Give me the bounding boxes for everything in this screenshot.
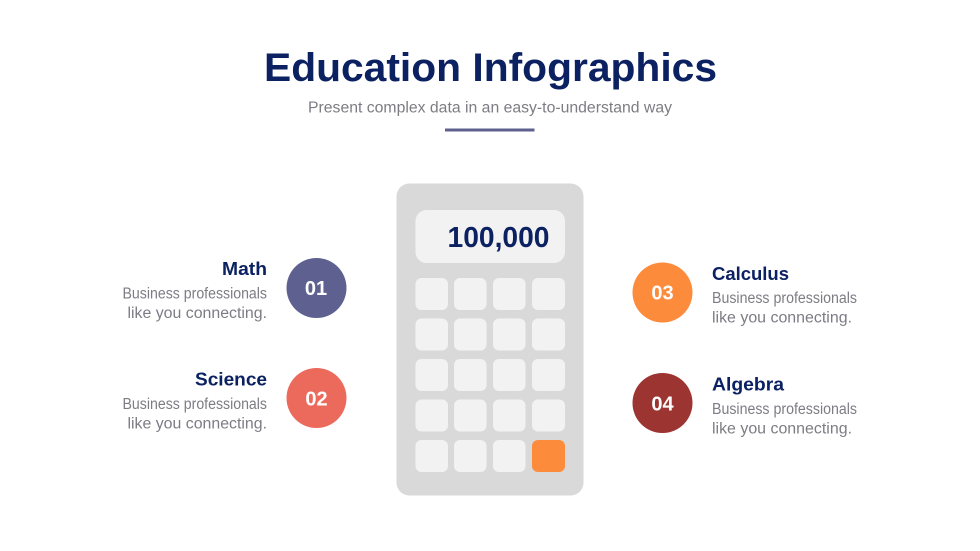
algebra description — [712, 401, 857, 438]
calculus description: Business professionals — [712, 290, 857, 307]
science number badge: 02 — [305, 388, 328, 410]
science number badge — [286, 368, 346, 428]
algebra number badge — [632, 373, 692, 433]
item 03: calculus — [632, 262, 857, 326]
algebra description: Business professionals — [712, 401, 857, 418]
math number badge: 01 — [305, 278, 327, 300]
calculus heading: Calculus — [712, 264, 789, 284]
orange key — [532, 440, 565, 472]
calculator screen — [416, 210, 565, 263]
math description: like you connecting. — [128, 305, 267, 322]
calculus number badge: 03 — [651, 282, 674, 304]
science description — [122, 396, 267, 432]
calculator body — [396, 184, 584, 496]
item 01: math — [122, 258, 346, 322]
science heading: Science — [195, 370, 267, 390]
math description: Business professionals — [122, 286, 267, 302]
science description: Business professionals — [122, 396, 267, 413]
title: Education Infographics — [264, 46, 717, 90]
title underline — [445, 128, 534, 132]
calculator keys — [416, 278, 565, 472]
calculus number badge — [632, 262, 692, 322]
calculator display value: 100,000 — [448, 222, 550, 254]
math heading: Math — [222, 259, 267, 279]
item 02: science — [122, 368, 346, 432]
algebra number badge: 04 — [651, 394, 674, 416]
science description: like you connecting. — [128, 416, 267, 432]
math description — [122, 286, 267, 322]
algebra description: like you connecting. — [712, 420, 852, 438]
algebra heading: Algebra — [712, 374, 785, 394]
subtitle: Present complex data in an easy-to-understand way — [308, 100, 672, 116]
math number badge — [286, 258, 346, 318]
item 04: algebra — [632, 373, 857, 438]
calculus description: like you connecting. — [712, 310, 852, 326]
calculator — [396, 184, 584, 496]
calculus description — [712, 290, 857, 326]
